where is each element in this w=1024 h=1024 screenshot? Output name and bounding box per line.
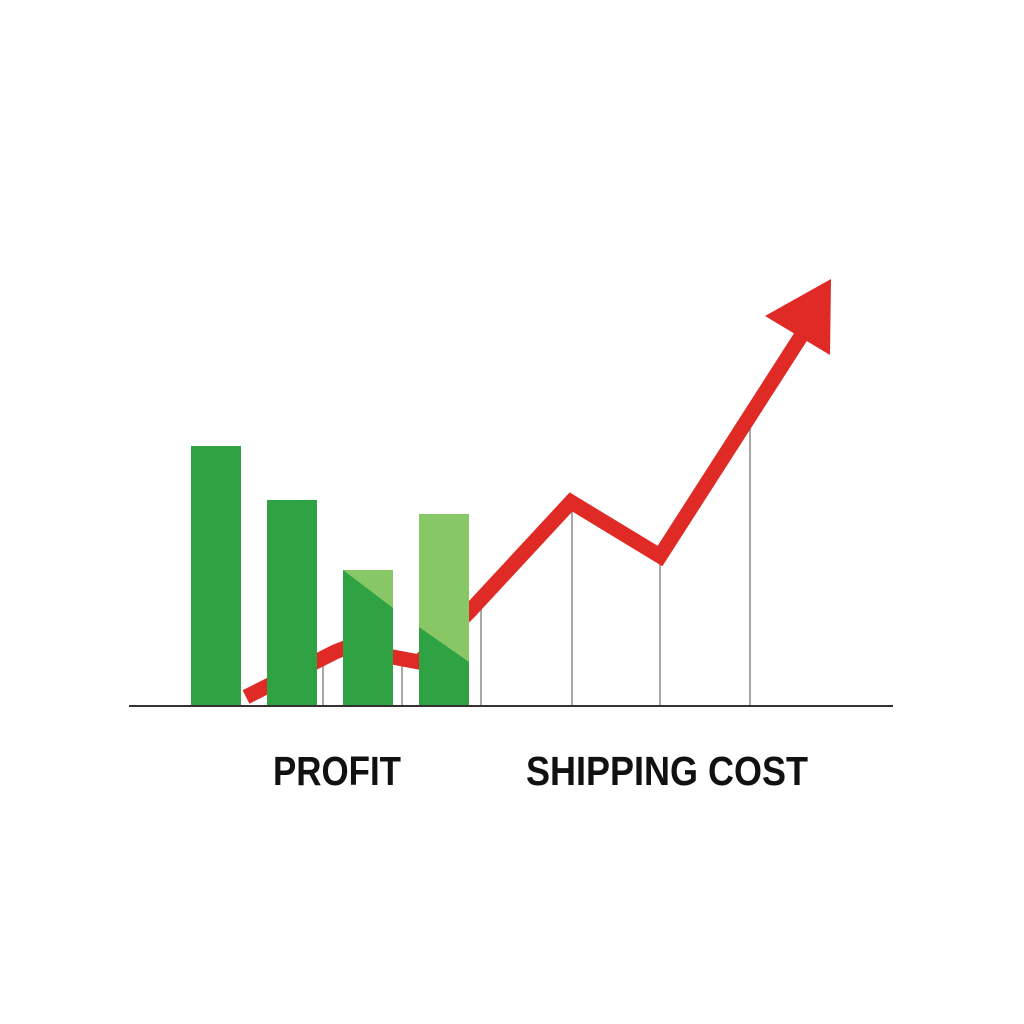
gridlines <box>323 428 750 705</box>
axis <box>129 705 893 707</box>
label: profit: PROFIT <box>273 748 401 794</box>
label: shipping cost: SHIPPING COST <box>526 748 808 794</box>
shipping cost line with arrow <box>246 279 831 697</box>
profit bars <box>191 446 469 705</box>
icon: arrowhead <box>765 279 831 355</box>
